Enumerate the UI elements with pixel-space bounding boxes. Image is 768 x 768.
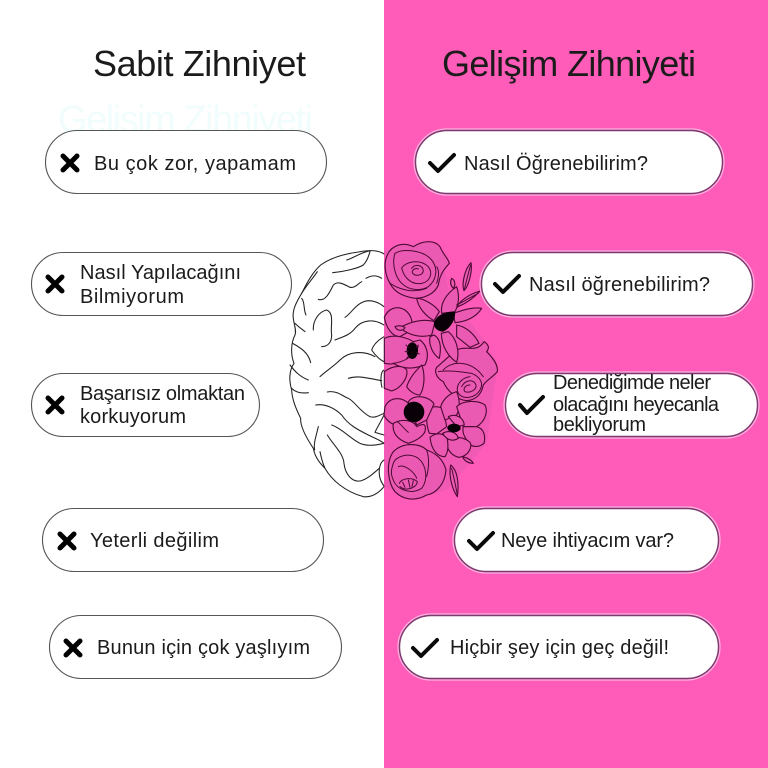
pill: Bunun için çok yaşlıyım: Bunun için çok yaşlıyım [97, 637, 310, 659]
pill: Denediğimde neler olacağını heyecanla bekliyorum: olacağını heyecanla [553, 394, 720, 416]
rose top [385, 242, 449, 298]
flower backing tint [384, 247, 497, 500]
pill: Hiçbir şey için geç değil! [398, 614, 720, 680]
pill: Bu çok zor, yapamam: Bu çok zor, yapamam [94, 153, 296, 175]
pill: Yeterli değilim: Yeterli değilim [90, 530, 219, 552]
pill: Başarısız olmaktan korkuyorum [32, 374, 260, 436]
pill: Neye ihtiyacım var?: Neye ihtiyacım var? [501, 530, 674, 552]
brain left hemisphere [290, 251, 384, 497]
pill: Nasıl Yapılacağını Bilmiyorum: Bilmiyorum [80, 286, 184, 308]
pill: Neye ihtiyacım var? [453, 507, 720, 573]
pill: Denediğimde neler olacağını heyecanla bekliyorum [504, 372, 759, 438]
leaf bottom [450, 457, 473, 497]
pill: Denediğimde neler olacağını heyecanla bekliyorum: Denediğimde neler [553, 372, 711, 394]
rose bottom [388, 445, 446, 499]
faint ghost heading behind first pill: Gelişim Zihniyeti [58, 123, 313, 165]
pill: Denediğimde neler olacağını heyecanla bekliyorum: bekliyorum [553, 414, 646, 436]
panel: fixed mindset pills [32, 130, 342, 678]
pill: Bunun için çok yaşlıyım [50, 616, 342, 678]
title: Sabit Zihniyet: Sabit Zihniyet [93, 43, 306, 84]
pill: Başarısız olmaktan korkuyorum: korkuyorum [80, 406, 186, 428]
faint ghost heading behind first pill [58, 99, 313, 165]
pill: Nasıl Öğrenebilirim? [414, 129, 724, 195]
brain illustration [290, 242, 497, 500]
large star flower [395, 287, 482, 362]
leaves top [451, 263, 480, 307]
pill: Nasıl Yapılacağını Bilmiyorum: Nasıl Yapılacağını [80, 262, 241, 284]
pill: Nasıl Öğrenebilirim?: Nasıl Öğrenebilirim? [464, 153, 648, 175]
pill: Nasıl öğrenebilirim?: Nasıl öğrenebilirim? [529, 274, 710, 296]
pill: Nasıl Yapılacağını Bilmiyorum [32, 252, 292, 316]
pill: Başarısız olmaktan korkuyorum: Başarısız olmaktan [80, 383, 245, 405]
title: Gelişim Zihniyeti: Gelişim Zihniyeti [442, 43, 696, 84]
anemone upper left [384, 308, 427, 395]
flowers on right half [384, 242, 497, 500]
pill: Nasıl öğrenebilirim? [480, 251, 754, 317]
poppy center [384, 397, 434, 443]
pill: Bu çok zor, yapamam [46, 130, 326, 194]
rose right [436, 342, 497, 401]
pill: Yeterli değilim [42, 508, 324, 572]
pill: Hiçbir şey için geç değil!: Hiçbir şey için geç değil! [450, 637, 669, 659]
panel: growth mindset pills [398, 129, 759, 680]
magnolia bottom right [426, 392, 486, 457]
faint ghost heading behind first pill: Gelişim Zihniyeti [58, 99, 313, 141]
